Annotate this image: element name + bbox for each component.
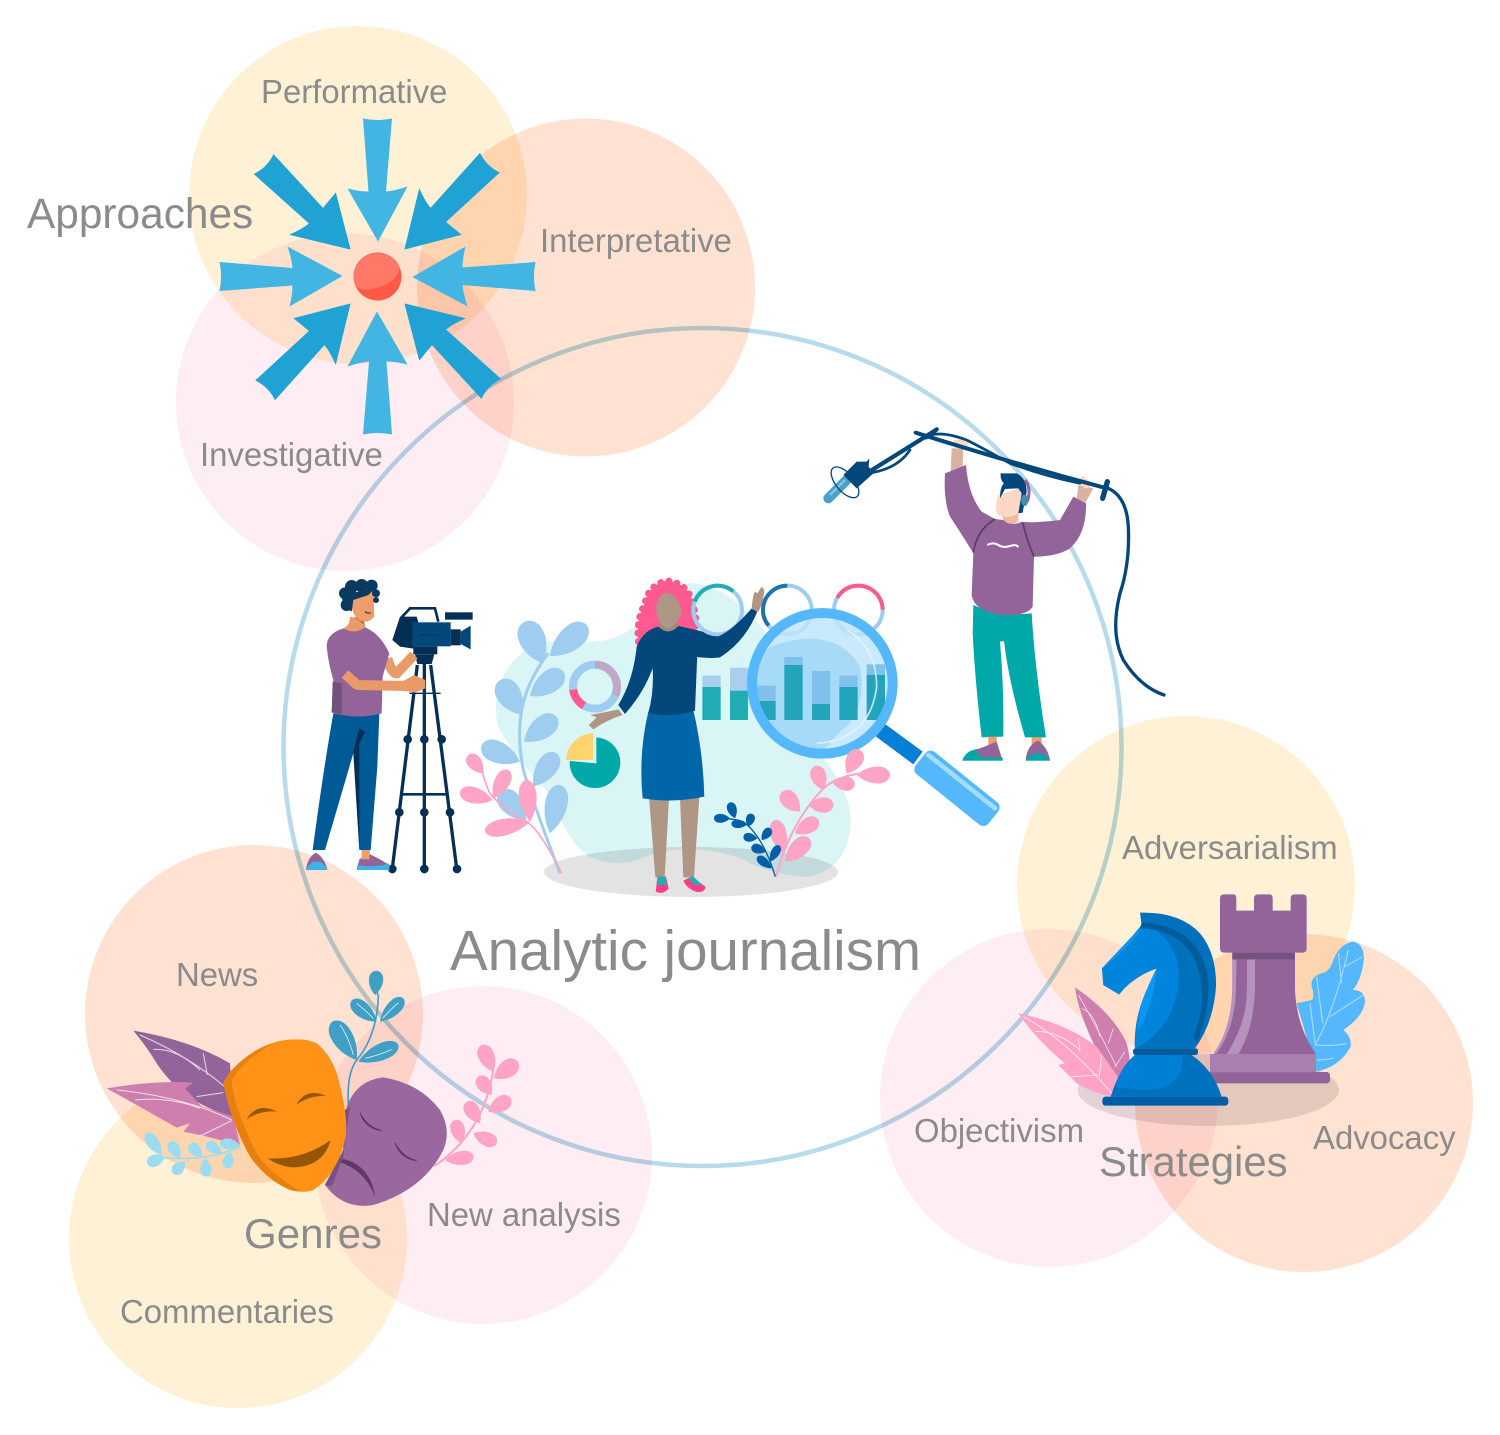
chart rings [686, 576, 892, 644]
plant: pink [458, 750, 562, 873]
hand [589, 709, 623, 729]
magnifier ring [752, 613, 893, 754]
mask: happy [223, 1039, 346, 1192]
lens inner shade [755, 638, 862, 754]
bars outside lens [702, 668, 748, 720]
panel: genres circles [69, 845, 652, 1408]
shoes [306, 853, 327, 870]
leaf: magenta [107, 1082, 240, 1145]
panel: approaches circles [176, 26, 755, 571]
circle: investigative [176, 233, 514, 571]
arms skin [951, 448, 1093, 503]
sprig: pink [434, 1042, 523, 1167]
circle: performative [189, 26, 527, 364]
label: advocacy: Advocacy [1313, 1119, 1456, 1156]
illustration: theatre masks and leaves [107, 970, 523, 1206]
circle: objectivism [880, 929, 1218, 1267]
pants [313, 713, 379, 850]
label: objectivism: Objectivism [914, 1112, 1084, 1149]
plant: pink [767, 746, 890, 877]
label: news: News [176, 956, 258, 993]
leaf: pink [1018, 1013, 1120, 1097]
arm [675, 608, 757, 658]
sprig: teal blue [324, 970, 408, 1105]
circle: adversarialism [1017, 716, 1355, 1054]
hair [339, 579, 380, 612]
chess rook [1207, 894, 1330, 1083]
shoes [656, 876, 705, 893]
blob background [496, 583, 851, 877]
neck [343, 617, 366, 633]
skirt [641, 710, 704, 800]
label: adversarialism: Adversarialism [1122, 829, 1338, 866]
back arm [387, 655, 414, 673]
leaf: purple [133, 1031, 233, 1117]
tripod [388, 654, 461, 873]
magnifier lens [752, 613, 893, 754]
illustration: boom operator [826, 429, 1164, 761]
main ring: analytic journalism [284, 328, 1122, 1166]
plant: blue [477, 616, 595, 873]
shoes [962, 741, 1050, 761]
microphone [826, 458, 873, 502]
circle: news [85, 845, 423, 1183]
label: performative: Performative [261, 73, 447, 110]
leaf: blue [1297, 942, 1365, 1072]
boom pole and cable [867, 429, 1164, 695]
illustration: cameraman with tripod [306, 579, 473, 873]
mask: sad [325, 1077, 447, 1206]
illustration: lower plants [714, 746, 890, 877]
neck and face [659, 620, 677, 634]
legs [649, 797, 699, 877]
camera [392, 608, 473, 654]
top [618, 626, 720, 715]
heading: approaches: Approaches [27, 190, 253, 237]
chart: donut [565, 657, 625, 717]
title: analytic journalism: Analytic journalism [450, 919, 921, 982]
leaf: magenta [1075, 987, 1130, 1080]
label: interpretative: Interpretative [540, 222, 732, 259]
hand [752, 587, 764, 612]
ankles [988, 737, 1042, 748]
face [350, 592, 374, 622]
head [996, 473, 1029, 524]
hands [953, 438, 1093, 489]
pants [973, 605, 1046, 737]
icon: converging arrows [220, 118, 536, 434]
front arm [345, 674, 407, 686]
shirt [945, 465, 1086, 615]
magnifier handle [876, 723, 1002, 829]
ground shadow [1078, 1054, 1339, 1126]
illustration: woman presenter [589, 581, 720, 893]
hair [638, 581, 696, 642]
illustration: data analysis backdrop [496, 583, 851, 897]
illustration: chess pieces and leaves [1018, 894, 1365, 1126]
chart: pie [566, 733, 620, 788]
shirt [327, 627, 389, 717]
panel: strategies circles [880, 716, 1473, 1272]
circle: advocacy [1135, 934, 1473, 1272]
heading: genres: Genres [244, 1210, 382, 1257]
label: commentaries: Commentaries [120, 1293, 334, 1330]
chart: rings, bars and magnifier [675, 576, 1002, 829]
circle: commentaries [69, 1070, 407, 1408]
chess knight [1102, 913, 1228, 1106]
label: new analysis: New analysis [427, 1196, 621, 1233]
heading: strategies: Strategies [1099, 1138, 1288, 1185]
plant: dark blue [714, 801, 783, 877]
label: investigative: Investigative [200, 436, 383, 473]
circle: interpretative [417, 118, 755, 456]
illustration: charts and plants [458, 616, 625, 873]
sprig: light blue [142, 1130, 240, 1178]
ground shadow [544, 847, 838, 897]
bars inside lens [757, 630, 885, 743]
circle: new analysis [314, 986, 652, 1324]
